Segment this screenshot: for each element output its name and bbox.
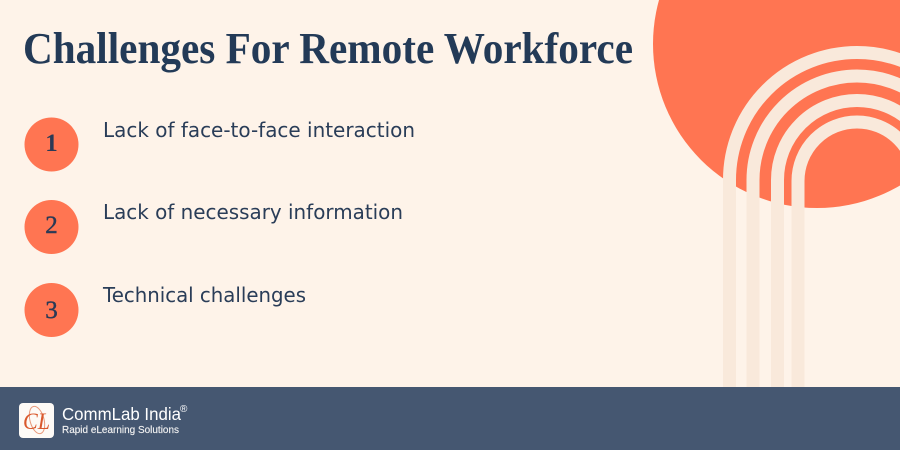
brand name: CommLab India (62, 404, 181, 424)
list item 2 (24, 200, 403, 254)
logo icon: CL (23, 409, 50, 434)
title: Challenges For Remote Workforce (23, 24, 633, 73)
footer bar (0, 387, 900, 450)
list item 2: 2 (45, 212, 58, 239)
decoration: orange circle with arches (653, 0, 900, 387)
list item 1: 1 (45, 130, 58, 157)
list item 2: Lack of necessary information (103, 200, 403, 224)
tagline: Rapid eLearning Solutions (62, 424, 179, 436)
list item 1: Lack of face-to-face interaction (103, 118, 415, 142)
registered mark: ® (180, 404, 188, 415)
list item 1 (24, 118, 415, 172)
logo icon (19, 403, 54, 438)
list item 3: 3 (45, 297, 58, 324)
list item 3 (24, 283, 306, 337)
list item 3: Technical challenges (102, 283, 306, 307)
